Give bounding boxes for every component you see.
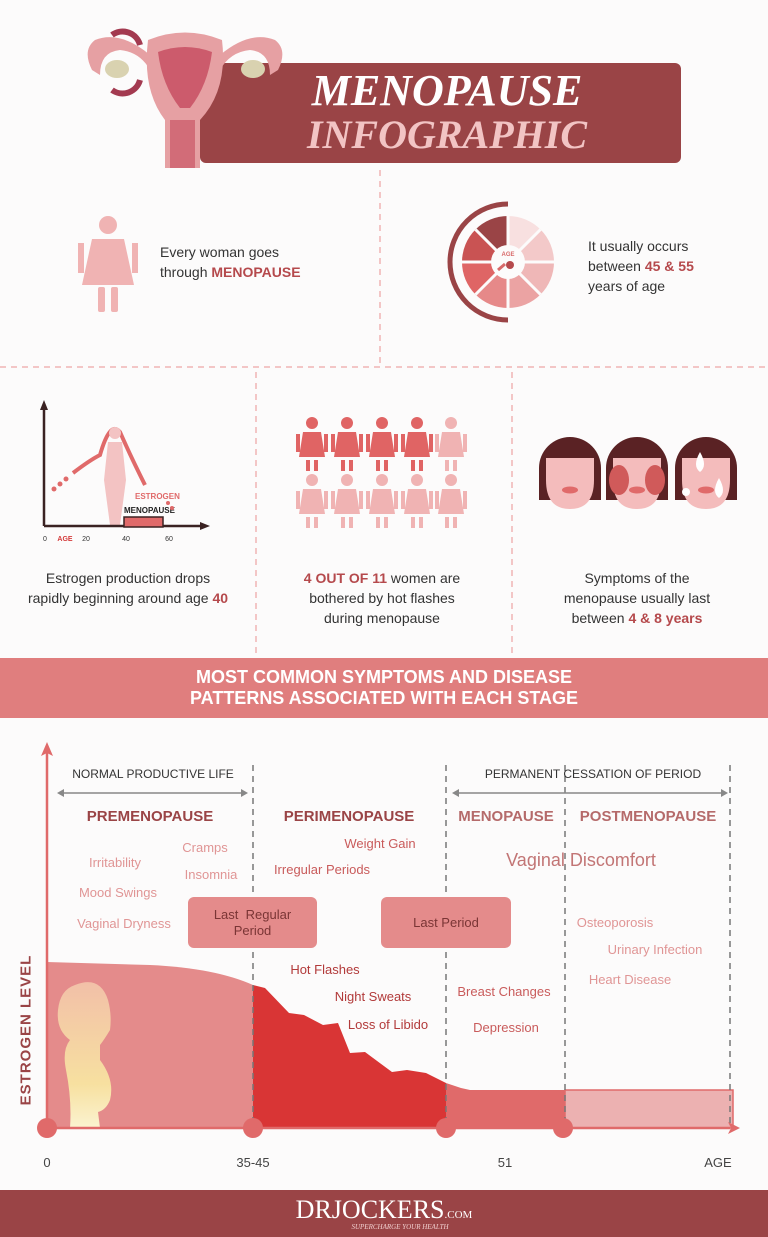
icon: age pie: AGE (501, 252, 515, 258)
symptoms text: Irregular Periods (274, 862, 370, 877)
footer: SUPERCHARGE YOUR HEALTH (351, 1223, 449, 1231)
text: every woman: through MENOPAUSE (160, 264, 301, 280)
title banner: INFOGRAPHIC (307, 112, 587, 157)
symptoms text: Breast Changes (457, 984, 551, 999)
symptoms text: Night Sweats (335, 989, 411, 1004)
symptoms text: Loss of Libido (348, 1017, 428, 1032)
title banner (200, 63, 681, 163)
box: last regular period (188, 897, 317, 948)
text: hot flashes stat: bothered by hot flashes (309, 590, 455, 606)
text: symptoms duration: Symptoms of the (584, 570, 690, 586)
heading: menopause: MENOPAUSE (458, 808, 554, 825)
chart: estrogen mini graph: 40 (122, 536, 130, 543)
text: symptoms duration: between 4 & 8 years (572, 610, 702, 626)
symptoms text: Heart Disease (589, 972, 671, 987)
text: age range: between 45 & 55 (588, 258, 694, 274)
text: age range: years of age (588, 278, 665, 294)
section banner: PATTERNS ASSOCIATED WITH EACH STAGE (190, 688, 578, 708)
chart: estrogen mini graph: 20 (82, 536, 90, 543)
heading: postmenopause: POSTMENOPAUSE (580, 808, 716, 825)
symptoms text: Weight Gain (344, 836, 416, 851)
chart: estrogen stages (37, 742, 740, 1138)
heading: perimenopause: PERIMENOPAUSE (284, 808, 414, 825)
text: symptoms duration (564, 570, 710, 626)
text: age range (588, 238, 694, 294)
symptoms text: Cramps (182, 840, 228, 855)
text: every woman: Every woman goes (160, 244, 279, 260)
axis tick: 0: 0 (43, 1155, 51, 1170)
chart: estrogen mini graph (40, 400, 210, 543)
text: normal productive life: NORMAL PRODUCTIVE LIFE (72, 767, 234, 781)
icon: uterus (88, 28, 282, 168)
text: symptoms duration: menopause usually last (564, 590, 710, 606)
symptoms text: Irritability (89, 855, 141, 870)
text: permanent cessation: PERMANENT CESSATION OF PERIOD (485, 767, 701, 781)
section banner (0, 658, 768, 718)
icon: age pie (448, 202, 554, 322)
axis tick: 51: 51 (498, 1155, 512, 1170)
text: estrogen drops: Estrogen production drops (46, 570, 210, 586)
box: last regular period: Period (234, 922, 271, 938)
symptoms text: Osteoporosis (577, 915, 653, 930)
chart: estrogen mini graph: 60 (165, 536, 173, 543)
symptoms text: Urinary Infection (608, 942, 702, 957)
heading: premenopause: PREMENOPAUSE (87, 808, 213, 825)
symptoms text: Mood Swings (79, 885, 157, 900)
text: estrogen drops (28, 570, 228, 606)
icon: woman (78, 216, 138, 312)
chart: estrogen mini graph: MENOPAUSE (124, 506, 176, 515)
symptoms text: Insomnia (185, 867, 237, 882)
box: last period (381, 897, 511, 948)
axis label: estrogen level: ESTROGEN LEVEL (18, 955, 34, 1105)
footer (0, 1190, 768, 1237)
title banner: MENOPAUSE (312, 66, 582, 115)
symptoms text: Vaginal Dryness (77, 916, 171, 931)
symptoms text: Depression (473, 1020, 539, 1035)
text: hot flashes stat: during menopause (324, 610, 440, 626)
footer: DRJOCKERS.COM (296, 1195, 472, 1224)
axis tick: age: AGE (704, 1155, 732, 1170)
text: hot flashes stat (304, 570, 460, 626)
text: every woman (160, 244, 301, 280)
chart: estrogen mini graph: ESTROGEN (135, 492, 180, 501)
section banner: MOST COMMON SYMPTOMS AND DISEASE (196, 667, 572, 687)
box: last regular period: Last Regular (214, 906, 291, 922)
symptoms text: Hot Flashes (290, 962, 360, 977)
box: last period: Last Period (413, 915, 479, 930)
axis tick: 35-45: 35-45 (236, 1155, 270, 1170)
text: estrogen drops: rapidly beginning around age 40 (28, 590, 228, 606)
icon: women grid (296, 417, 467, 528)
icon: faces (539, 437, 737, 509)
text: age range: It usually occurs (588, 238, 688, 254)
chart: estrogen mini graph: AGE (57, 536, 73, 543)
text: hot flashes stat: 4 OUT OF 11 women are (304, 570, 460, 586)
symptoms text: Vaginal Discomfort (506, 850, 656, 870)
chart: estrogen mini graph: 0 (43, 536, 47, 543)
